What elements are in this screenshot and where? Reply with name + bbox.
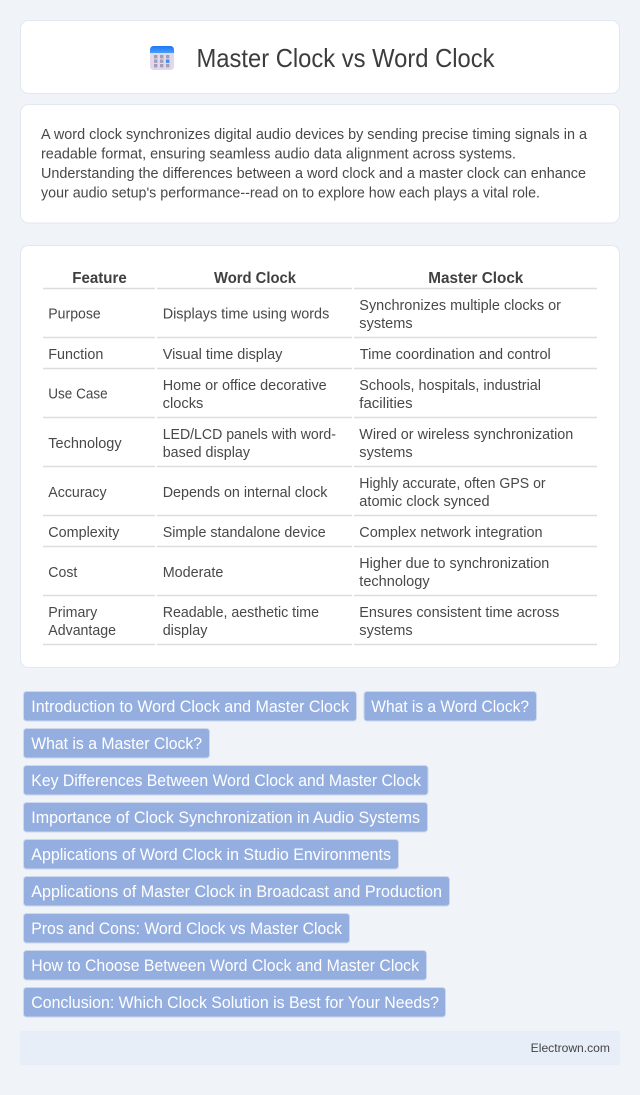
topic chips <box>24 692 536 1017</box>
chip: How to Choose <box>24 950 426 980</box>
chip: Applications of Master Clock <box>24 876 450 906</box>
chip: What is a Word Clock: What is a Word Clock? <box>371 697 529 716</box>
table row: Primary Advantage: Readable, aesthetic time <box>163 605 319 621</box>
panel: introduction <box>20 104 620 223</box>
table row: Purpose: Displays time using words <box>163 307 329 323</box>
table row: Cost <box>43 556 597 596</box>
table row: Complexity: Simple standalone device <box>163 525 326 541</box>
chip: Conclusion <box>24 988 446 1017</box>
table header: Feature <box>72 270 127 287</box>
table row: Primary Advantage: systems <box>359 623 413 639</box>
table row: Purpose: Purpose <box>48 307 101 323</box>
table row: Use Case: Schools, hospitals, industrial <box>359 378 541 394</box>
chip: Conclusion: Conclusion: Which Clock Solution is Best for Your Needs? <box>31 993 439 1012</box>
table row: Purpose: Synchronizes multiple clocks or <box>359 298 561 314</box>
table row: Cost: technology <box>359 574 430 590</box>
table row: Cost: Cost <box>48 565 77 581</box>
table row: Accuracy: atomic clock synced <box>359 494 490 510</box>
intro text: A word clock synchronizes digital audio devices by sending precise timing signals in a <box>41 127 588 143</box>
table row: Function <box>43 347 597 368</box>
table row: Accuracy: Accuracy <box>48 485 107 501</box>
table row: Use Case: facilities <box>359 396 413 412</box>
intro text: your audio setup's performance--read on to explore how each plays a vital role. <box>41 186 540 202</box>
icon: calendar <box>150 46 174 70</box>
chip: Pros and Cons <box>24 914 350 943</box>
chip: Applications of Word Clock: Applications of Word Clock in Studio Environments <box>31 845 391 864</box>
title: Master Clock vs Word Clock <box>196 45 495 73</box>
table row: Function: Time coordination and control <box>360 347 551 363</box>
intro text: Understanding the differences between a word clock and a master clock can enhance <box>41 166 586 182</box>
footer: Electrown.com <box>531 1041 610 1055</box>
table row: Primary Advantage: Advantage <box>48 623 116 639</box>
table row: Technology: LED/LCD panels with word- <box>163 427 336 443</box>
table row: Use Case: clocks <box>163 396 203 412</box>
table row: Primary Advantage: Ensures consistent time across <box>359 605 559 621</box>
table row: Purpose <box>43 298 597 338</box>
table row: Complexity: Complex network integration <box>359 525 543 541</box>
table row: Use Case: Home or office decorative <box>163 378 327 394</box>
table row: Accuracy: Highly accurate, often GPS or <box>359 476 546 492</box>
table row: Complexity: Complexity <box>48 525 120 541</box>
chip: Pros and Cons: Pros and Cons: Word Clock vs Master Clock <box>31 919 343 938</box>
table row: Technology: Wired or wireless synchronization <box>359 427 573 443</box>
chip: What is a Word Clock <box>364 692 536 721</box>
chip: Key Differences <box>24 766 428 795</box>
intro text <box>41 127 588 202</box>
table header: Master Clock <box>428 270 523 287</box>
table row: Technology: systems <box>359 445 413 461</box>
table row: Purpose: systems <box>359 316 413 332</box>
chip: Applications of Word Clock <box>24 840 398 869</box>
table row: Primary Advantage: display <box>163 623 208 639</box>
table header: Word Clock <box>214 270 296 287</box>
chip: What is a Master Clock: What is a Master Clock? <box>31 734 202 753</box>
footer <box>20 1031 620 1065</box>
table row: Technology: based display <box>163 445 251 461</box>
table row: Function: Function <box>48 347 103 363</box>
chip: Importance <box>24 802 428 832</box>
table row: Cost: Higher due to synchronization <box>359 556 549 572</box>
table row: Cost: Moderate <box>163 565 223 581</box>
table row: Use Case <box>43 378 597 418</box>
chip: Introduction <box>24 692 356 721</box>
table row: Function: Visual time display <box>163 347 283 363</box>
table row: Accuracy <box>43 476 597 516</box>
table row: Complexity <box>43 525 597 546</box>
chip: Importance: Importance of Clock Synchronization in Audio Systems <box>31 808 420 827</box>
chip: What is a Master Clock <box>24 728 210 758</box>
table row: Primary Advantage: Primary <box>48 605 98 621</box>
table row: Primary Advantage <box>43 605 597 644</box>
chip: Applications of Master Clock: Applications of Master Clock in Broadcast and Production <box>31 882 442 901</box>
intro text: readable format, ensuring seamless audio data alignment across systems. <box>41 146 516 162</box>
chip: Introduction: Introduction to Word Clock and Master Clock <box>31 697 350 716</box>
table row: Use Case: Use Case <box>48 387 108 403</box>
table row: Technology <box>43 427 597 466</box>
chip: How to Choose: How to Choose Between Word Clock and Master Clock <box>31 956 420 975</box>
table row: Technology: Technology <box>48 436 122 452</box>
panel: comparison table <box>20 246 620 668</box>
table row: Accuracy: Depends on internal clock <box>163 485 328 501</box>
panel: title card <box>20 20 620 94</box>
chip: Key Differences: Key Differences Between Word Clock and Master Clock <box>31 771 422 790</box>
table header <box>43 270 597 288</box>
